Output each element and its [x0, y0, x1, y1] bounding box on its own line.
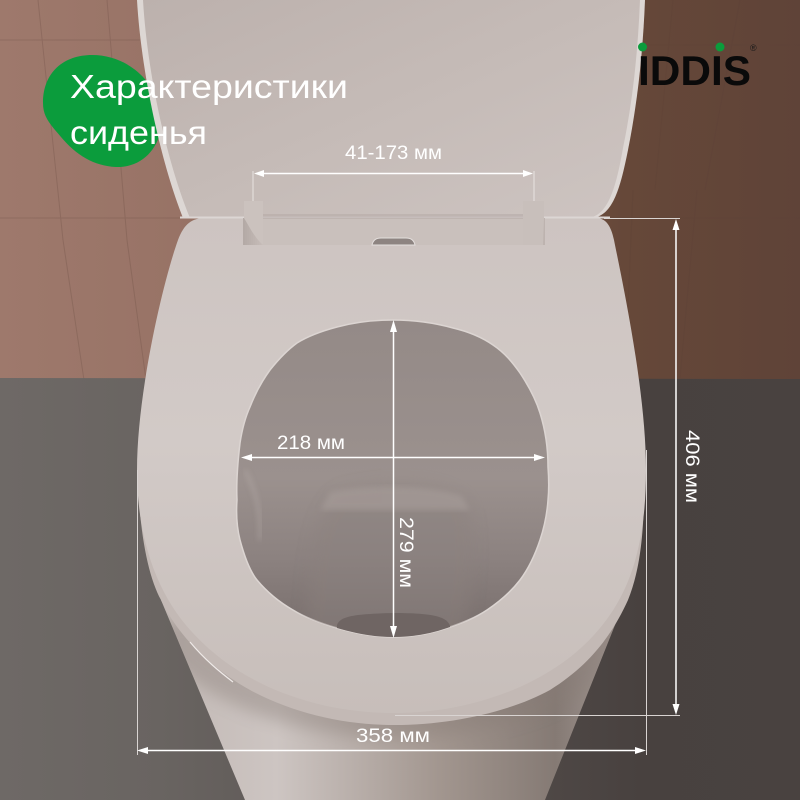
bowl water outlet: [337, 613, 450, 637]
dimension: seat width 358 мм: 358 мм: [356, 725, 430, 747]
seat lower rim: [139, 500, 644, 725]
logo: IDDIS: IDDIS: [638, 47, 751, 94]
seat rim highlight: [190, 642, 233, 682]
toilet bowl: [161, 600, 625, 800]
background: wall: [0, 0, 800, 380]
background: floor: [0, 378, 800, 800]
dimension: opening width 218 мм: [241, 432, 545, 461]
dimension: opening length 279 мм: 279 мм: [395, 517, 417, 588]
background: wall tile joints: [0, 0, 800, 380]
title: сиденья: [70, 114, 207, 151]
bowl interior shape: [300, 614, 474, 632]
dimension: hinge spacing 41-173 мм: [253, 142, 534, 201]
title: Характеристики: [70, 68, 348, 105]
hinge assembly: [180, 201, 610, 245]
dimension: opening width 218 мм: 218 мм: [277, 432, 345, 454]
hinge button: [372, 238, 415, 245]
dimension: opening length 279 мм: [390, 320, 417, 638]
dimension: seat width 358 мм: [137, 450, 646, 755]
badge: green blob: [43, 55, 162, 167]
title: [70, 68, 348, 151]
toilet lid: [137, 0, 645, 218]
logo: IDDIS: ®: [750, 43, 757, 53]
dimension: seat length 406 мм: [395, 218, 703, 716]
dimension: hinge spacing 41-173 мм: 41-173 мм: [345, 142, 442, 164]
dimension: seat length 406 мм: 406 мм: [681, 430, 703, 503]
seat rim shadow: [160, 620, 630, 738]
seat opening: [237, 320, 549, 640]
toilet seat: [137, 218, 646, 713]
